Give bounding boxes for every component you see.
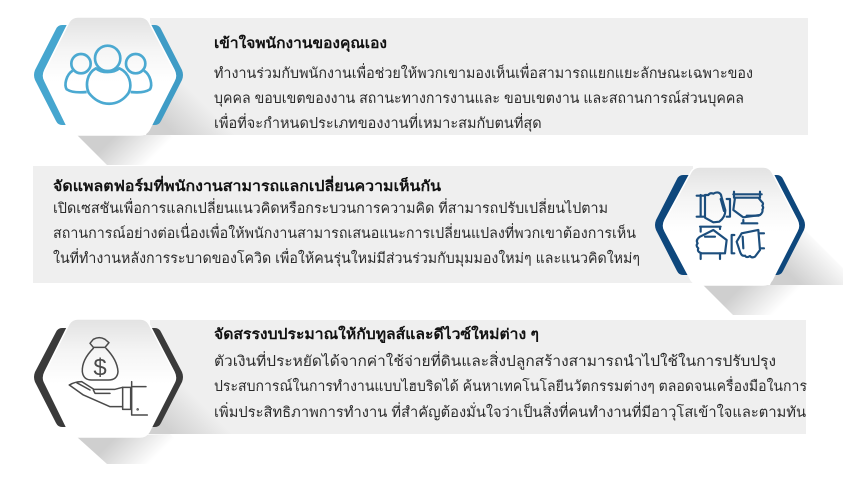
- hexagon badge: people: [34, 17, 200, 165]
- heading: budget for tools and devices: จัดสรรงบประมาณให้กับทูลส์และดีไวซ์ใหม่ต่าง ๆ: [214, 325, 539, 343]
- text block: budget for tools and devices: ประสบการณ์ในการทำงานแบบไฮบริดได้ ค้นหาเทคโนโลยีนวัตกรรมต่างๆ ตลอดจนเครื่องมือในการ: [214, 376, 807, 395]
- icon: hand holding money bag: [69, 338, 147, 415]
- text block: platform for exchanging views: เปิดเซสชันเพื่อการแลกเปลี่ยนแนวคิดหรือกระบวนการความคิด ที่สามารถปรับเปลี่ยนไปตาม: [53, 198, 608, 217]
- hexagon badge: money: [34, 319, 200, 464]
- text block: budget for tools and devices: เพิ่มประสิทธิภาพการทำงาน ที่สำคัญต้องมั่นใจว่าเป็นสิ่งที่คนทำงานที่มีอาวุโสเข้าใจและตามทัน: [214, 402, 806, 421]
- panel: budget for tools and devices: [146, 320, 807, 434]
- panel: platform for exchanging views: [33, 166, 693, 283]
- heading: platform for exchanging views: จัดแพลตฟอร์มที่พนักงานสามารถแลกเปลี่ยนความเห็นกัน: [53, 175, 441, 195]
- icon: group of people: [66, 46, 151, 104]
- text block: budget for tools and devices: [214, 351, 807, 421]
- panel: understand your employees: [146, 18, 808, 135]
- icon: four interlocked hands: [697, 192, 764, 259]
- heading: understand your employees: เข้าใจพนักงานของคุณเอง: [214, 34, 387, 52]
- text block: understand your employees: เพื่อที่จะกำหนดประเภทของงานที่เหมาะสมกับตนที่สุด: [214, 113, 542, 132]
- text block: understand your employees: [214, 63, 753, 132]
- text block: understand your employees: ทำงานร่วมกับพนักงานเพื่อช่วยให้พวกเขามองเห็นเพื่อสามารถแยกแยะลักษณะเฉพาะของ: [214, 63, 753, 82]
- text block: platform for exchanging views: [53, 198, 640, 267]
- text block: platform for exchanging views: สถานการณ์อย่างต่อเนื่องเพื่อให้พนักงานสามารถเสนอแนะการเปลี่ยนแปลงที่พวกเขาต้องการเห็น: [53, 223, 636, 242]
- icon: hand holding money bag: $: [93, 354, 107, 381]
- text block: budget for tools and devices: ตัวเงินที่ประหยัดได้จากค่าใช้จ่ายที่ดินและสิ่งปลูกสร้างสามารถนำไปใช้ในการปรับปรุง: [214, 351, 776, 370]
- text block: understand your employees: บุคคล ขอบเขตของงาน สถานะทางการงานและ ขอบเขตงาน และสถานการณ์ส่วนบุคคล: [214, 90, 744, 107]
- text block: platform for exchanging views: ในที่ทำงานหลังการระบาดของโควิด เพื่อให้คนรุ่นใหม่มีส่วนร่วมกับมุมมองใหม่ๆ และแนวคิดใหม่ๆ: [53, 248, 640, 267]
- hexagon badge: hands: [655, 167, 843, 315]
